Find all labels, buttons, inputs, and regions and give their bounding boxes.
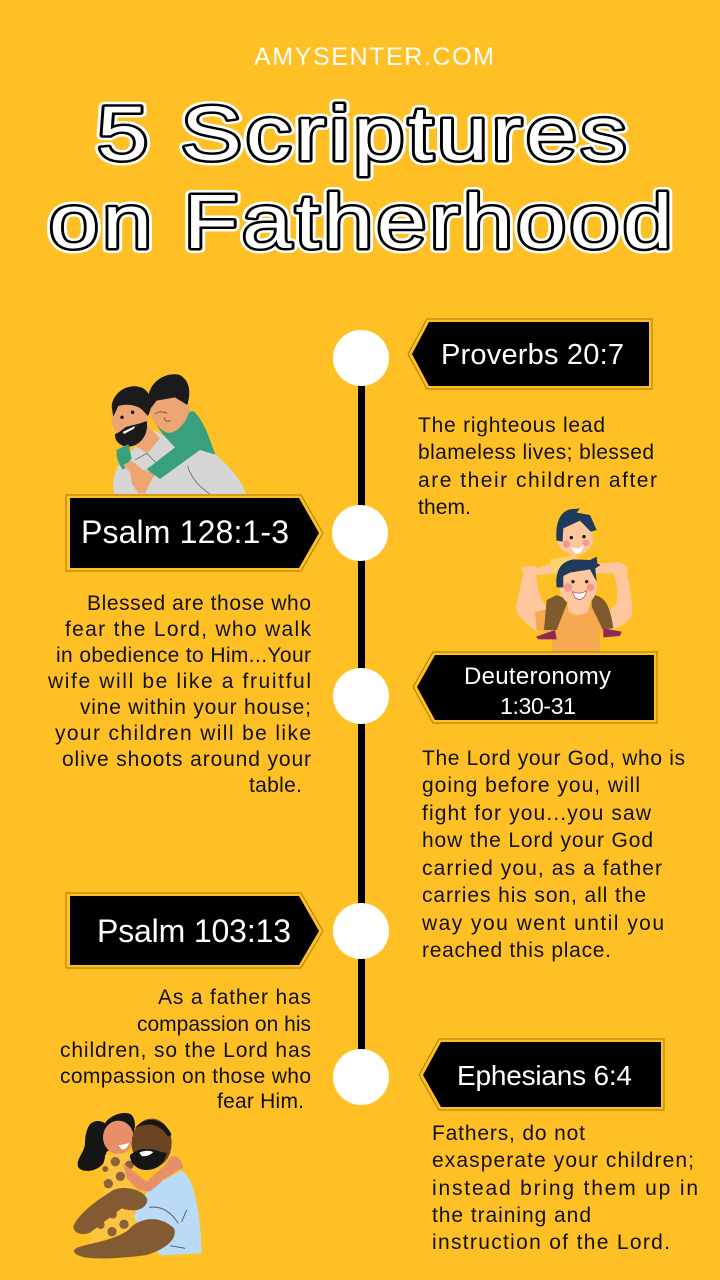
- illustration: father hugging daughter: [73, 1113, 202, 1258]
- badge: Psalm 103:13: Psalm 103:13: [97, 913, 291, 949]
- illustration: child on father's shoulders: [516, 508, 632, 653]
- text: Ephesians 6:4: Fathers, do not: [432, 1122, 585, 1145]
- text: Psalm 128:1-3: in obedience to Him...Your: [56, 644, 311, 667]
- badge: Psalm 128:1-3: Psalm 128:1-3: [81, 514, 289, 550]
- text: Psalm 128:1-3: wife will be like a fruitful: [47, 670, 311, 693]
- text: Deuteronomy 1:30-31: The Lord your God, who is: [422, 747, 685, 770]
- title: 5 Scriptures: [97, 91, 630, 177]
- badge: Proverbs 20:7: [408, 319, 652, 389]
- text: Proverbs 20:7: them.: [418, 496, 471, 519]
- text: Proverbs 20:7: [418, 414, 657, 519]
- illustration: father with son on back: [108, 374, 246, 494]
- text: Ephesians 6:4: the training and: [432, 1204, 591, 1227]
- text: Psalm 128:1-3: Blessed are those who: [87, 592, 311, 615]
- text: Psalm 103:13: compassion on those who: [60, 1065, 311, 1088]
- text: Ephesians 6:4: instead bring them up in: [432, 1177, 698, 1200]
- text: Psalm 128:1-3: [47, 592, 312, 797]
- text: Deuteronomy 1:30-31: how the Lord your God: [422, 829, 653, 852]
- title: [49, 91, 676, 265]
- text: Deuteronomy 1:30-31: [421, 747, 685, 962]
- badge: Psalm 103:13: [66, 893, 323, 968]
- badge: Deuteronomy 1:30-31: Deuteronomy: [464, 663, 611, 690]
- badge: Psalm 128:1-3: [66, 495, 323, 571]
- text: Proverbs 20:7: The righteous lead: [418, 414, 605, 437]
- text: Psalm 128:1-3: olive shoots around your: [62, 748, 311, 771]
- text: Psalm 103:13: As a father has: [158, 986, 311, 1009]
- text: Proverbs 20:7: are their children after: [418, 469, 657, 492]
- text: Psalm 103:13: children, so the Lord has: [60, 1039, 311, 1062]
- timeline nodes: [332, 330, 389, 1105]
- text: Psalm 103:13: compassion on his: [137, 1013, 311, 1036]
- text: Deuteronomy 1:30-31: fight for you...you saw: [422, 802, 652, 825]
- text: Deuteronomy 1:30-31: carried you, as a father: [422, 857, 662, 880]
- text: Deuteronomy 1:30-31: reached this place.: [422, 939, 611, 962]
- text: Deuteronomy 1:30-31: carries his son, all the: [422, 884, 646, 907]
- text: Psalm 128:1-3: your children will be like: [55, 722, 311, 745]
- text: Psalm 128:1-3: fear the Lord, who walk: [65, 618, 312, 641]
- title: on Fatherhood: [49, 179, 676, 265]
- text: Psalm 128:1-3: vine within your house;: [80, 696, 311, 719]
- text: Ephesians 6:4: [432, 1122, 698, 1254]
- text: Psalm 103:13: [60, 986, 311, 1113]
- timeline line: [358, 385, 365, 1057]
- text: Ephesians 6:4: exasperate your children;: [432, 1149, 694, 1172]
- text: Ephesians 6:4: instruction of the Lord.: [432, 1231, 670, 1254]
- badge: Ephesians 6:4: [419, 1039, 664, 1110]
- text: Deuteronomy 1:30-31: going before you, will: [422, 774, 640, 797]
- text: Psalm 128:1-3: table.: [249, 774, 302, 797]
- site name: AMYSENTER.COM: [254, 43, 494, 71]
- text: Proverbs 20:7: blameless lives; blessed: [418, 441, 654, 464]
- badge: Deuteronomy 1:30-31: [413, 652, 657, 723]
- badge: Deuteronomy 1:30-31: 1:30-31: [500, 693, 576, 719]
- badge: Proverbs 20:7: Proverbs 20:7: [441, 339, 624, 371]
- title: 5 Scriptures: [97, 91, 630, 177]
- text: Psalm 103:13: fear Him.: [217, 1090, 304, 1113]
- title: on Fatherhood: [49, 179, 676, 265]
- badge: Ephesians 6:4: Ephesians 6:4: [457, 1060, 632, 1091]
- text: Deuteronomy 1:30-31: way you went until you: [421, 912, 664, 935]
